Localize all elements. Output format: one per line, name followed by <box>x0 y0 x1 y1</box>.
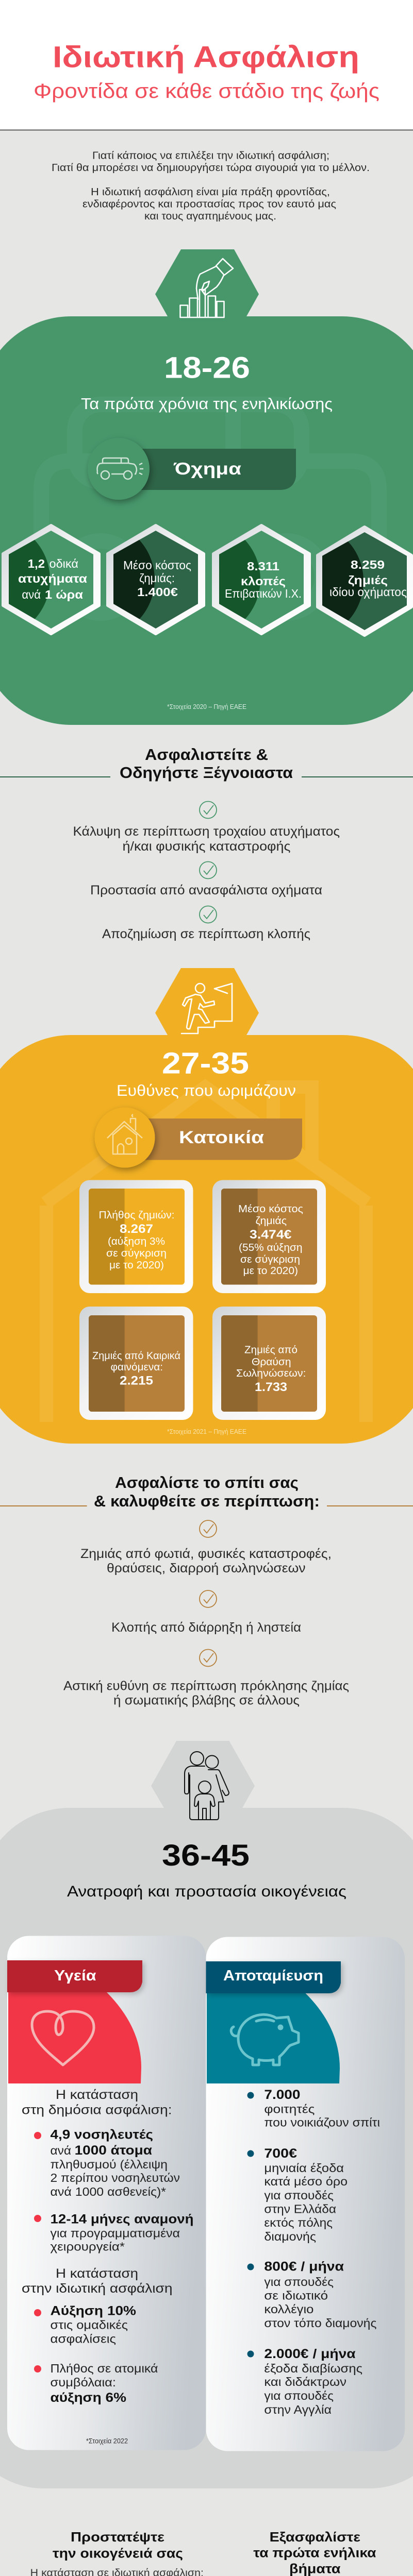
badge: vehicle: Όχημα <box>173 459 241 478</box>
card: weather damage: φαινόμενα: <box>110 1362 163 1373</box>
red quarter <box>8 1992 141 2083</box>
heading: τα πρώτα ενήλικα <box>253 2545 376 2561</box>
bullet: private college: στον τόπο διαμονής <box>264 2316 376 2330</box>
ribbon: health <box>7 1960 142 1992</box>
hexagon: average damage cost: 1.400€ <box>137 585 178 599</box>
bullet: monthly expenses Greece: για σπουδές <box>264 2189 334 2202</box>
text: public insurance: Η κατάσταση <box>56 2088 138 2102</box>
hexagon: own damage <box>316 526 413 637</box>
heading: Εξασφαλίστε <box>270 2529 360 2545</box>
card: number of claims: (αύξηση 3% <box>108 1236 165 1247</box>
benefit list: Ζημιάς από φωτιά, φυσικές καταστροφές, <box>80 1547 332 1561</box>
badge: home <box>95 1108 302 1167</box>
bullet: monthly expenses Greece: στην Ελλάδα <box>264 2202 336 2215</box>
bullet: students <box>247 2088 380 2129</box>
card: pipe damage: 1.733 <box>255 1380 287 1394</box>
intro text: ενδιαφέροντος και προστασίας προς τον εαυτό μας <box>82 199 336 210</box>
bullet: studies in England: για σπουδές <box>264 2389 334 2402</box>
bullet: group policies: στις ομαδικές <box>51 2318 128 2332</box>
bullet: individual policies: Πλήθος σε ατομικά <box>51 2362 158 2375</box>
card: weather damage: Ζημιές από Καιρικά <box>92 1350 180 1362</box>
hexagon: own damage: ζημιές <box>348 573 388 587</box>
bullet: private college: για σπουδές <box>264 2275 334 2289</box>
source note: *Στοιχεία 2021 – Πηγή ΕΑΕΕ <box>167 1428 246 1435</box>
card: average claim cost: με το 2020) <box>243 1265 298 1277</box>
panel: age 27-35 <box>0 968 413 1444</box>
panel: age 18-26 <box>0 249 413 725</box>
card: average claim cost: 3.474€ <box>250 1228 292 1242</box>
bullet: waiting <box>34 2212 194 2253</box>
benefit list: ή/και φυσικής καταστροφής <box>123 839 291 854</box>
icon: house <box>107 1114 142 1154</box>
bullet: monthly expenses Greece <box>247 2146 348 2243</box>
bullet: individual policies <box>34 2362 158 2405</box>
heading: Οδηγήστε Ξέγνοιαστα <box>120 764 293 782</box>
bullet: nurses: 1000 άτομα <box>75 2143 153 2158</box>
hexagon: average damage cost: ζημιάς: <box>139 571 175 585</box>
card: pipe damage: Ζημιές από <box>244 1345 298 1356</box>
bullet: monthly expenses Greece: διαμονής <box>264 2230 316 2243</box>
heading: Ασφαλίστε το σπίτι σας <box>115 1473 299 1492</box>
heading <box>120 745 293 782</box>
heading: βήματα <box>289 2561 341 2576</box>
hexagon: accidents: 1 ώρα <box>45 588 83 601</box>
bullet: nurses: πληθυσμού (έλλειψη <box>51 2158 168 2171</box>
bullet: group policies: Αύξηση 10% <box>51 2304 136 2318</box>
bullet: monthly expenses Greece: μηνιαία έξοδα <box>264 2161 344 2175</box>
panel: age 36-45 <box>0 1741 413 2488</box>
intro text: Γιατί θα μπορέσει να δημιουργήσει τώρα σιγουριά για το μέλλον. <box>52 162 370 174</box>
heading: & καλυφθείτε σε περίπτωση: <box>94 1492 320 1510</box>
section: vehicle insurance benefits <box>0 745 413 941</box>
card: pipe damage: Θραύση <box>252 1357 291 1368</box>
hexagon: thefts: κλοπές <box>241 574 286 588</box>
teal quarter <box>207 1993 340 2083</box>
heading: την οικογένειά σας <box>53 2545 183 2561</box>
intro text <box>52 150 370 222</box>
hexagon: own damage: ιδίου οχήματος <box>329 585 407 599</box>
age heading: 18-26 <box>164 351 250 384</box>
ribbon: savings <box>206 1961 341 1993</box>
card: number of claims: Πλήθος ζημιών: <box>99 1210 174 1221</box>
age subheading: Ευθύνες που ωριμάζουν <box>117 1081 296 1099</box>
bullet: group policies: ασφαλίσεις <box>51 2332 116 2345</box>
bullet: private college: κολλέγιο <box>264 2302 313 2316</box>
panel: savings: Αποταμίευση <box>223 1968 323 1984</box>
bullet: studies in England: στην Αγγλία <box>264 2403 332 2416</box>
card: average claim cost: ζημιάς <box>256 1215 287 1227</box>
bullet: students: που νοικιάζουν σπίτι <box>264 2115 380 2129</box>
bullet: nurses: ανά <box>51 2144 71 2157</box>
check icons <box>200 1520 217 1666</box>
check icons <box>200 802 217 923</box>
hexagon: thefts: Επιβατικών Ι.Χ. <box>225 587 302 600</box>
subtitle: Φροντίδα σε κάθε στάδιο της ζωής <box>34 80 379 103</box>
hexagon: accidents <box>0 521 99 638</box>
hexagon: average damage cost <box>106 524 205 635</box>
car watermark <box>41 404 379 613</box>
benefit list: Κάλυψη σε περίπτωση τροχαίου ατυχήματος <box>73 824 340 839</box>
card: pipe damage <box>212 1307 326 1420</box>
bullet: waiting: 12-14 μήνες αναμονή <box>51 2212 194 2227</box>
bullet: studies in England <box>247 2347 362 2416</box>
age heading: 36-45 <box>162 1839 250 1872</box>
title <box>34 40 379 103</box>
icon: piggy bank <box>231 2014 299 2065</box>
bullet: private college: σε ιδιωτικό <box>264 2289 328 2302</box>
heading <box>53 2529 183 2561</box>
bullet: nurses: ανά 1000 ασθενείς)* <box>51 2185 166 2198</box>
source note: *Στοιχεία 2022 <box>86 2437 128 2445</box>
bullet: studies in England: και διδάκτρων <box>264 2375 346 2388</box>
bullet: studies in England: 2.000€ / μήνα <box>264 2347 356 2361</box>
benefit list <box>63 1547 349 1707</box>
hexagon: accidents: ανά <box>22 588 41 601</box>
bullet: private college <box>247 2260 376 2330</box>
hexagon: accidents: ατυχήματα <box>18 572 87 585</box>
icon: family <box>185 1752 229 1820</box>
bullet: students: 7.000 <box>264 2088 300 2102</box>
card: number of claims: με το 2020) <box>109 1260 164 1271</box>
hexagon: average damage cost: Μέσο κόστος <box>123 558 191 572</box>
age subheading: Ανατροφή και προστασία οικογένειας <box>67 1883 346 1900</box>
panel background green <box>0 249 413 725</box>
text: private insurance <box>22 2266 173 2296</box>
icon: hand and bar chart <box>180 259 233 317</box>
text: private insurance: στην ιδιωτική ασφάλιση <box>22 2281 173 2296</box>
benefit list: Αποζημίωση σε περίπτωση κλοπής <box>102 927 310 941</box>
card: weather damage: 2.215 <box>120 1374 153 1388</box>
card: weather damage <box>79 1307 193 1420</box>
bullet: studies in England: έξοδα διαβίωσης <box>264 2362 362 2375</box>
hexagon: thefts <box>212 524 311 635</box>
text: public insurance: στη δημόσια ασφάλιση: <box>22 2103 172 2117</box>
bullet: waiting: χειρουργεία* <box>51 2240 125 2253</box>
card: number of claims <box>79 1180 193 1293</box>
card: pipe damage: Σωληνώσεων: <box>236 1368 306 1379</box>
card: number of claims: σε σύγκριση <box>106 1248 167 1259</box>
hexagon: thefts: 8.311 <box>247 560 279 573</box>
text: public insurance <box>22 2088 172 2117</box>
icon: car <box>97 458 143 479</box>
panel: health <box>7 1936 206 2450</box>
benefit list: Προστασία από ανασφάλιστα οχήματα <box>90 883 322 897</box>
badge: vehicle <box>88 438 296 500</box>
heading: Ασφαλιστείτε & <box>145 745 268 764</box>
section: protect your family <box>16 2529 218 2576</box>
source note: *Στοιχεία 2020 – Πηγή ΕΑΕΕ <box>167 703 246 710</box>
main title: Ιδιωτική Ασφάλιση <box>53 40 359 74</box>
hexagon: own damage: 8.259 <box>351 558 385 571</box>
card: number of claims: 8.267 <box>120 1222 153 1236</box>
bullet: individual policies: αύξηση 6% <box>51 2391 126 2405</box>
benefit list <box>73 824 340 941</box>
bullet: waiting: για προγραμματισμένα <box>51 2227 180 2240</box>
bullet: individual policies: συμβόλαια: <box>51 2376 116 2389</box>
panel: health: Υγεία <box>54 1968 96 1984</box>
panel background yellow <box>0 968 413 1444</box>
bullet: monthly expenses Greece: κατά μέσο όρο <box>264 2175 348 2188</box>
bullet: nurses: 2 περίπου νοσηλευτών <box>51 2171 180 2184</box>
benefit list: ή σωματικής βλάβης σε άλλους <box>113 1693 300 1707</box>
section: home insurance benefits <box>0 1473 413 1707</box>
bullet: nurses <box>34 2128 180 2198</box>
text: private insurance: Η κατάσταση <box>56 2266 138 2281</box>
bullet: private college: 800€ / μήνα <box>264 2260 344 2274</box>
hexagon: accidents: 1,2 <box>28 557 45 570</box>
intro text: και τους αγαπημένους μας. <box>144 211 276 222</box>
heading <box>253 2529 376 2576</box>
bullet: group policies <box>34 2304 136 2345</box>
bullet: nurses: 4,9 νοσηλευτές <box>51 2128 153 2142</box>
panel: savings <box>206 1937 405 2451</box>
bullet: students: φοιτητές <box>264 2102 315 2115</box>
bullet: monthly expenses Greece: εκτός πόλης <box>264 2216 333 2229</box>
intro text: Η ιδιωτική ασφάλιση είναι μία πράξη φροντίδας, <box>91 187 330 198</box>
heading <box>94 1473 320 1510</box>
badge: home: Κατοικία <box>179 1128 264 1147</box>
benefit list: Κλοπής από διάρρηξη ή ληστεία <box>111 1620 301 1635</box>
icon: heart <box>32 2011 94 2065</box>
benefit list: Αστική ευθύνη σε περίπτωση πρόκλησης ζημίας <box>63 1679 349 1693</box>
icon: person climbing stairs <box>181 984 232 1033</box>
section: secure children's first steps <box>253 2529 377 2576</box>
panel background grey <box>0 1741 413 2488</box>
card: average claim cost: σε σύγκριση <box>240 1254 300 1265</box>
heading: Προστατέψτε <box>71 2529 164 2545</box>
age subheading: Τα πρώτα χρόνια της ενηλικίωσης <box>81 395 333 413</box>
card: average claim cost: (55% αύξηση <box>239 1242 302 1253</box>
house watermark <box>45 1087 367 1422</box>
age heading: 27-35 <box>162 1047 249 1080</box>
intro text: Γιατί κάποιος να επιλέξει την ιδιωτική ασφάλιση; <box>92 150 329 162</box>
card: average claim cost <box>212 1180 326 1293</box>
hexagon: accidents: οδικά <box>49 557 78 570</box>
benefit list: θραύσεις, διαρροή σωληνώσεων <box>107 1561 306 1575</box>
bullet: monthly expenses Greece: 700€ <box>264 2146 297 2161</box>
card: average claim cost: Μέσο κόστος <box>238 1204 303 1215</box>
